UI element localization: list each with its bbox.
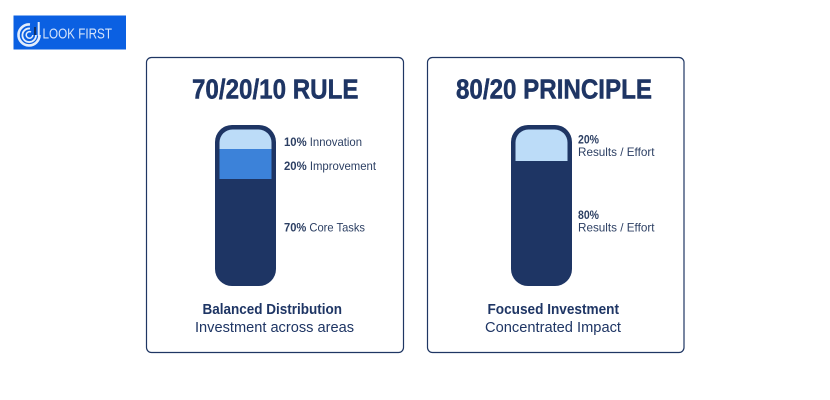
icon: target rings: [19, 22, 40, 45]
caption: investment across areas: Investment across areas: [195, 319, 354, 336]
label: 80% results / effort: Results / Effort: [578, 220, 655, 234]
label: 20% improvement: 20% Improvement: [284, 159, 377, 173]
panel: 70/20/10 rule: [146, 58, 404, 352]
label: 70% core tasks: 70% Core Tasks: [284, 220, 365, 234]
label: 20% results / effort: 20%: [578, 132, 599, 146]
stacked tube chart: [215, 125, 276, 286]
label: 80% results / effort: 80%: [578, 208, 599, 222]
heading: 80/20 principle: 80/20 PRINCIPLE: [456, 74, 652, 104]
two-part tube chart: [511, 125, 572, 286]
caption: balanced distribution: Balanced Distribution: [202, 301, 342, 318]
label: 10% innovation: 10% Innovation: [284, 135, 362, 149]
label: 20% results / effort: Results / Effort: [578, 145, 655, 159]
panel: 80/20 principle: [428, 58, 684, 352]
heading: 70/20/10 rule: 70/20/10 RULE: [192, 74, 358, 104]
label: 80% results / effort: [578, 208, 655, 234]
logo: Look First: [14, 16, 126, 50]
logo wordmark: LOOK FIRST: [42, 26, 112, 42]
caption: concentrated impact: Concentrated Impact: [485, 319, 622, 336]
caption: focused investment: Focused Investment: [488, 301, 619, 318]
label: 20% results / effort: [578, 132, 655, 159]
